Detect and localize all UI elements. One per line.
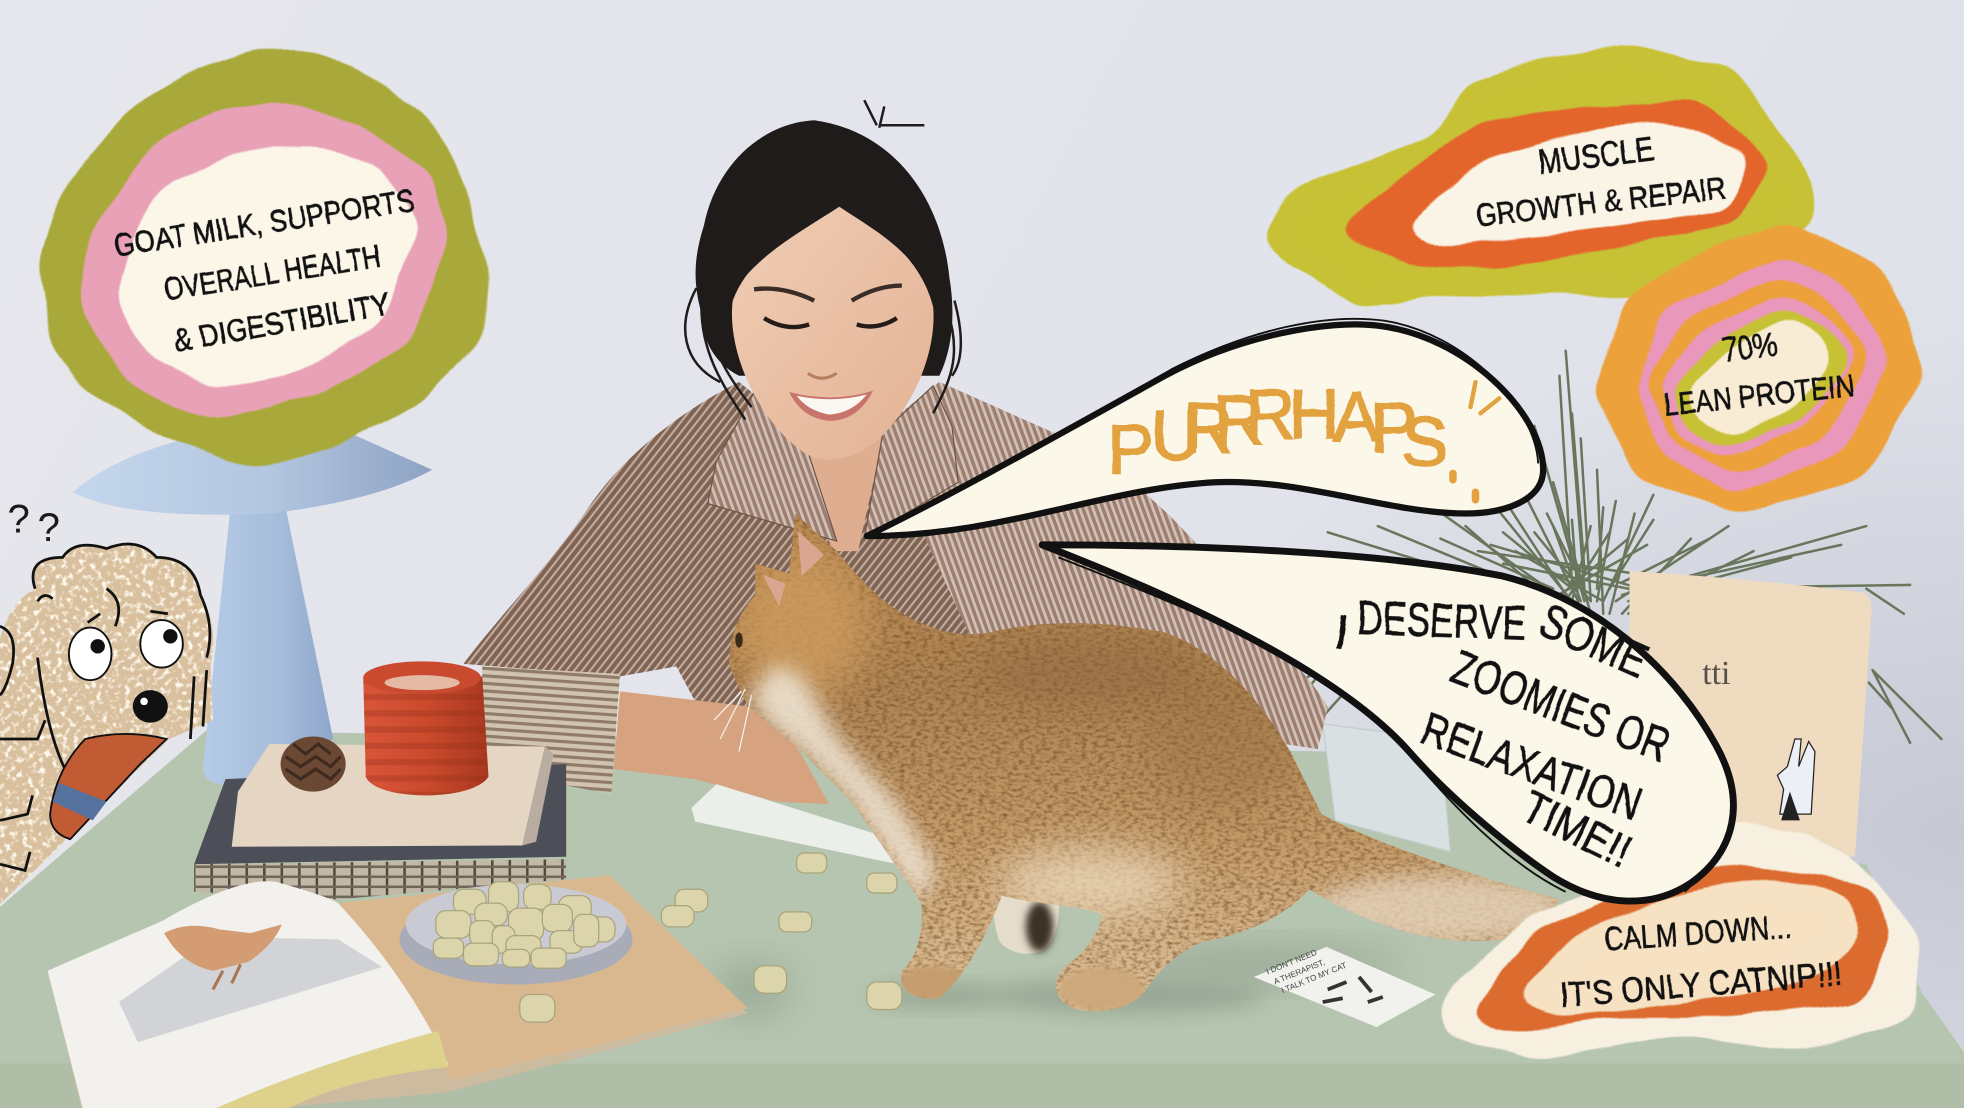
zoomies text: SOME: [1531, 594, 1656, 688]
note: catnip: [1425, 812, 1931, 1070]
open book: [48, 876, 748, 1108]
bubble shape: [1042, 545, 1733, 901]
small card: [1254, 947, 1435, 1027]
lime blob: [1250, 38, 1829, 316]
upper beige book: [232, 744, 545, 847]
plant stems: [1271, 351, 1941, 743]
dog body: [0, 544, 213, 904]
beige inner: [1501, 867, 1871, 1025]
goat milk text: GOAT MILK, SUPPORTS: [111, 183, 417, 264]
lamp: [73, 420, 432, 784]
question marks: [8, 497, 60, 550]
zoomies text: I: [1331, 606, 1352, 660]
catnip text: IT'S ONLY CATNIP!!!: [1558, 955, 1844, 1015]
lamp shade: [73, 420, 432, 515]
collar right: [864, 386, 958, 539]
orange ring: [1455, 854, 1899, 1045]
plate of treats: [400, 882, 633, 984]
books stack: [194, 744, 566, 899]
lamp stem: [203, 507, 333, 784]
dog illustration: [0, 497, 213, 904]
orange blob: [1323, 90, 1784, 278]
zoomies text: ZOOMIES OR: [1444, 641, 1677, 773]
orange ring: [1635, 267, 1879, 486]
dog eyes: [69, 620, 183, 680]
book page edge: [48, 876, 748, 1108]
pine cone: [281, 736, 346, 792]
lean protein text: LEAN PROTEIN: [1662, 368, 1856, 423]
face: [732, 207, 934, 460]
eyebrows: [754, 286, 902, 301]
question marks: ?: [8, 497, 30, 541]
muscle text: [1474, 130, 1728, 234]
cat far leg: [993, 883, 1059, 954]
cream centre: [1676, 308, 1839, 446]
note: lean protein: [1583, 213, 1934, 521]
bag cat illustration: [1777, 739, 1815, 820]
shirt right side: [877, 382, 1328, 749]
muscle text: MUSCLE: [1536, 130, 1656, 182]
goat milk text: [111, 183, 417, 359]
card drawing: [1323, 977, 1383, 1002]
lime ring: [1661, 298, 1861, 458]
goat milk text: & DIGESTIBILITY: [170, 286, 393, 359]
hair back: [696, 120, 952, 376]
product bag: [1628, 571, 1871, 857]
pink ring: [1626, 245, 1901, 504]
lean protein text: 70%: [1720, 325, 1779, 370]
chicken picture: [164, 924, 282, 990]
red mug: [363, 661, 488, 795]
cream blob: [1390, 108, 1764, 258]
nose: [808, 373, 837, 378]
person: [463, 100, 1328, 804]
zoomies text: RELAXATION: [1414, 703, 1648, 830]
tan right page: [338, 876, 748, 1080]
treats pile: [433, 882, 615, 968]
card text: I DON'T NEED: [1265, 948, 1318, 976]
card text: [1265, 948, 1348, 995]
cream blob: [105, 133, 428, 398]
zoomies text: DESERVE: [1356, 592, 1527, 651]
eyes: [764, 318, 897, 327]
speech bubble: zoomies: [1042, 545, 1733, 901]
forearm: [614, 691, 829, 804]
card text: A THERAPIST,: [1272, 958, 1326, 986]
yellow curled page: [215, 1031, 448, 1108]
catnip text: CALM DOWN...: [1602, 909, 1792, 958]
shirt: [463, 382, 1328, 749]
cat body: [729, 514, 1559, 1011]
pink blob: [68, 93, 458, 428]
cream outer blob: [1425, 812, 1931, 1070]
note: goat milk: [28, 38, 499, 476]
bubble shape: [867, 324, 1543, 536]
cat whiskers: [714, 689, 752, 752]
lower book cover: [194, 764, 566, 864]
catnip text: [1558, 909, 1844, 1015]
grey picture: [119, 937, 382, 1042]
dog lines: [0, 544, 210, 871]
zoomies text: TIME!!: [1514, 781, 1640, 877]
goat milk text: OVERALL HEALTH: [161, 239, 383, 308]
speech bubble: purrrhaps: [867, 319, 1543, 536]
dog tongue: [50, 734, 167, 839]
olive blob: [28, 38, 499, 476]
smile: [789, 391, 873, 421]
collar left: [708, 386, 837, 541]
dog nose: [133, 690, 168, 723]
scattered treats: [520, 853, 902, 1022]
question marks: ?: [38, 506, 60, 550]
shirt cuff: [482, 666, 620, 794]
muscle text: GROWTH & REPAIR: [1474, 170, 1728, 234]
hair wisps: [685, 100, 961, 420]
hair fringe: [729, 135, 933, 307]
spark marks: [1470, 382, 1499, 413]
cat light and shade patches: [733, 551, 1566, 1012]
lean protein text: [1662, 325, 1856, 423]
cat eye: [735, 633, 743, 648]
pink inner ring: [1650, 284, 1866, 468]
table top: [0, 730, 1964, 1108]
purrrhaps text: PURRRHAPS: [1107, 375, 1448, 488]
zoomies text: [1331, 592, 1677, 877]
note: muscle growth: [1250, 38, 1829, 316]
glass pot: [1323, 724, 1450, 852]
lower book pages: [194, 859, 566, 899]
notebook: [691, 784, 917, 867]
table shadows: [714, 947, 1403, 1015]
cat ear inner: [763, 531, 824, 606]
neck: [779, 413, 883, 551]
cat: [714, 514, 1566, 1012]
white left page: [48, 881, 448, 1108]
card text: I TALK TO MY CAT: [1280, 961, 1348, 995]
orange outer ring: [1583, 213, 1934, 521]
bag brand text: tti: [1702, 655, 1730, 692]
